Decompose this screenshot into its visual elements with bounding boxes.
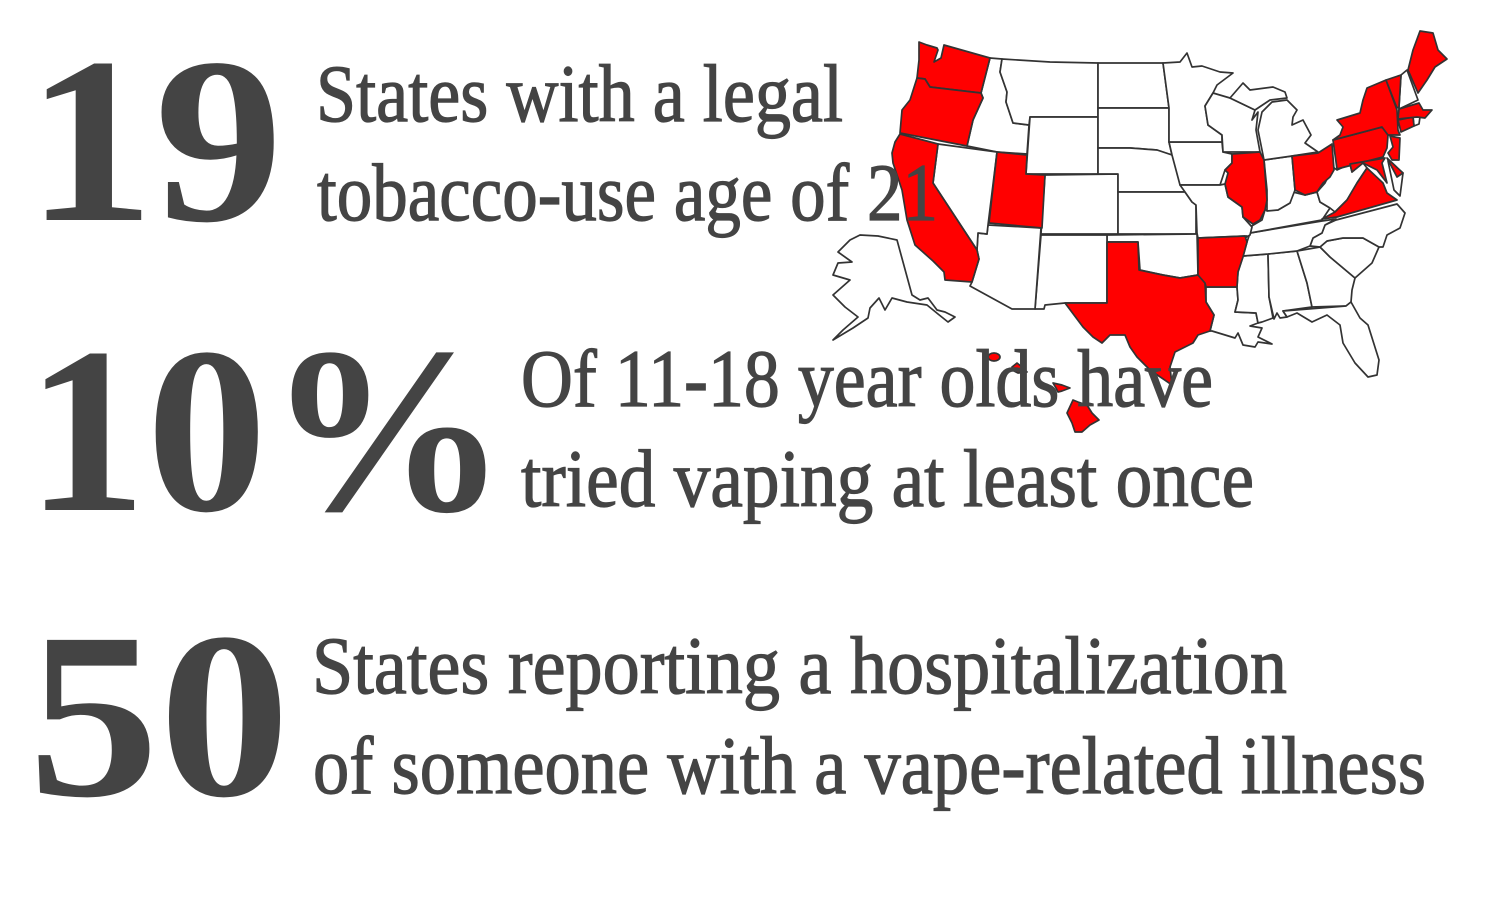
Maryland — [1350, 158, 1387, 183]
Massachusetts — [1398, 103, 1432, 119]
big number: 50: 50 — [28, 585, 290, 847]
icon: Alaska — [833, 235, 955, 340]
Connecticut — [1398, 117, 1414, 132]
Delaware — [1387, 158, 1403, 177]
stat 1 description: tobacco-use age of 21 — [317, 147, 938, 238]
states with the age-21 law, filled red — [892, 31, 1447, 432]
stat 2 description: tried vaping at least once — [521, 433, 1254, 524]
Pennsylvania — [1333, 127, 1388, 169]
New Jersey — [1388, 136, 1400, 160]
stat 3: 50 states — [28, 585, 1426, 847]
states without the age-21 law — [833, 53, 1420, 377]
stat 2: 10 percent — [26, 300, 1254, 562]
Maine — [1408, 31, 1447, 93]
big number: 19: 19 — [26, 10, 283, 272]
stat 3 description: States reporting a hospitalization — [312, 620, 1287, 711]
Vermont — [1386, 75, 1401, 108]
Texas — [1065, 242, 1214, 385]
Hawaii: Kauai — [988, 353, 1000, 361]
stat 1 description — [316, 48, 938, 238]
Ohio — [1292, 144, 1334, 195]
stat 2 description: Of 11-18 year olds have — [521, 333, 1213, 424]
Hawaii: Oahu — [1012, 363, 1027, 373]
Oregon — [900, 78, 983, 146]
map: US states with a legal tobacco-use age of 21 — [833, 31, 1447, 432]
Utah — [989, 152, 1045, 228]
Illinois — [1225, 152, 1267, 224]
New York — [1333, 80, 1400, 140]
Arkansas — [1198, 236, 1247, 287]
Hawaii: Maui — [1053, 383, 1070, 392]
Virginia — [1322, 168, 1397, 219]
Washington — [917, 42, 990, 93]
California — [892, 134, 979, 282]
Hawaii: big island — [1067, 400, 1099, 432]
stat 1: 19 states — [26, 10, 938, 272]
stat 1 description: States with a legal — [316, 48, 843, 139]
big number: 10%: 10% — [26, 300, 508, 562]
stat 2 description — [521, 333, 1254, 524]
stat 3 description — [312, 620, 1426, 811]
